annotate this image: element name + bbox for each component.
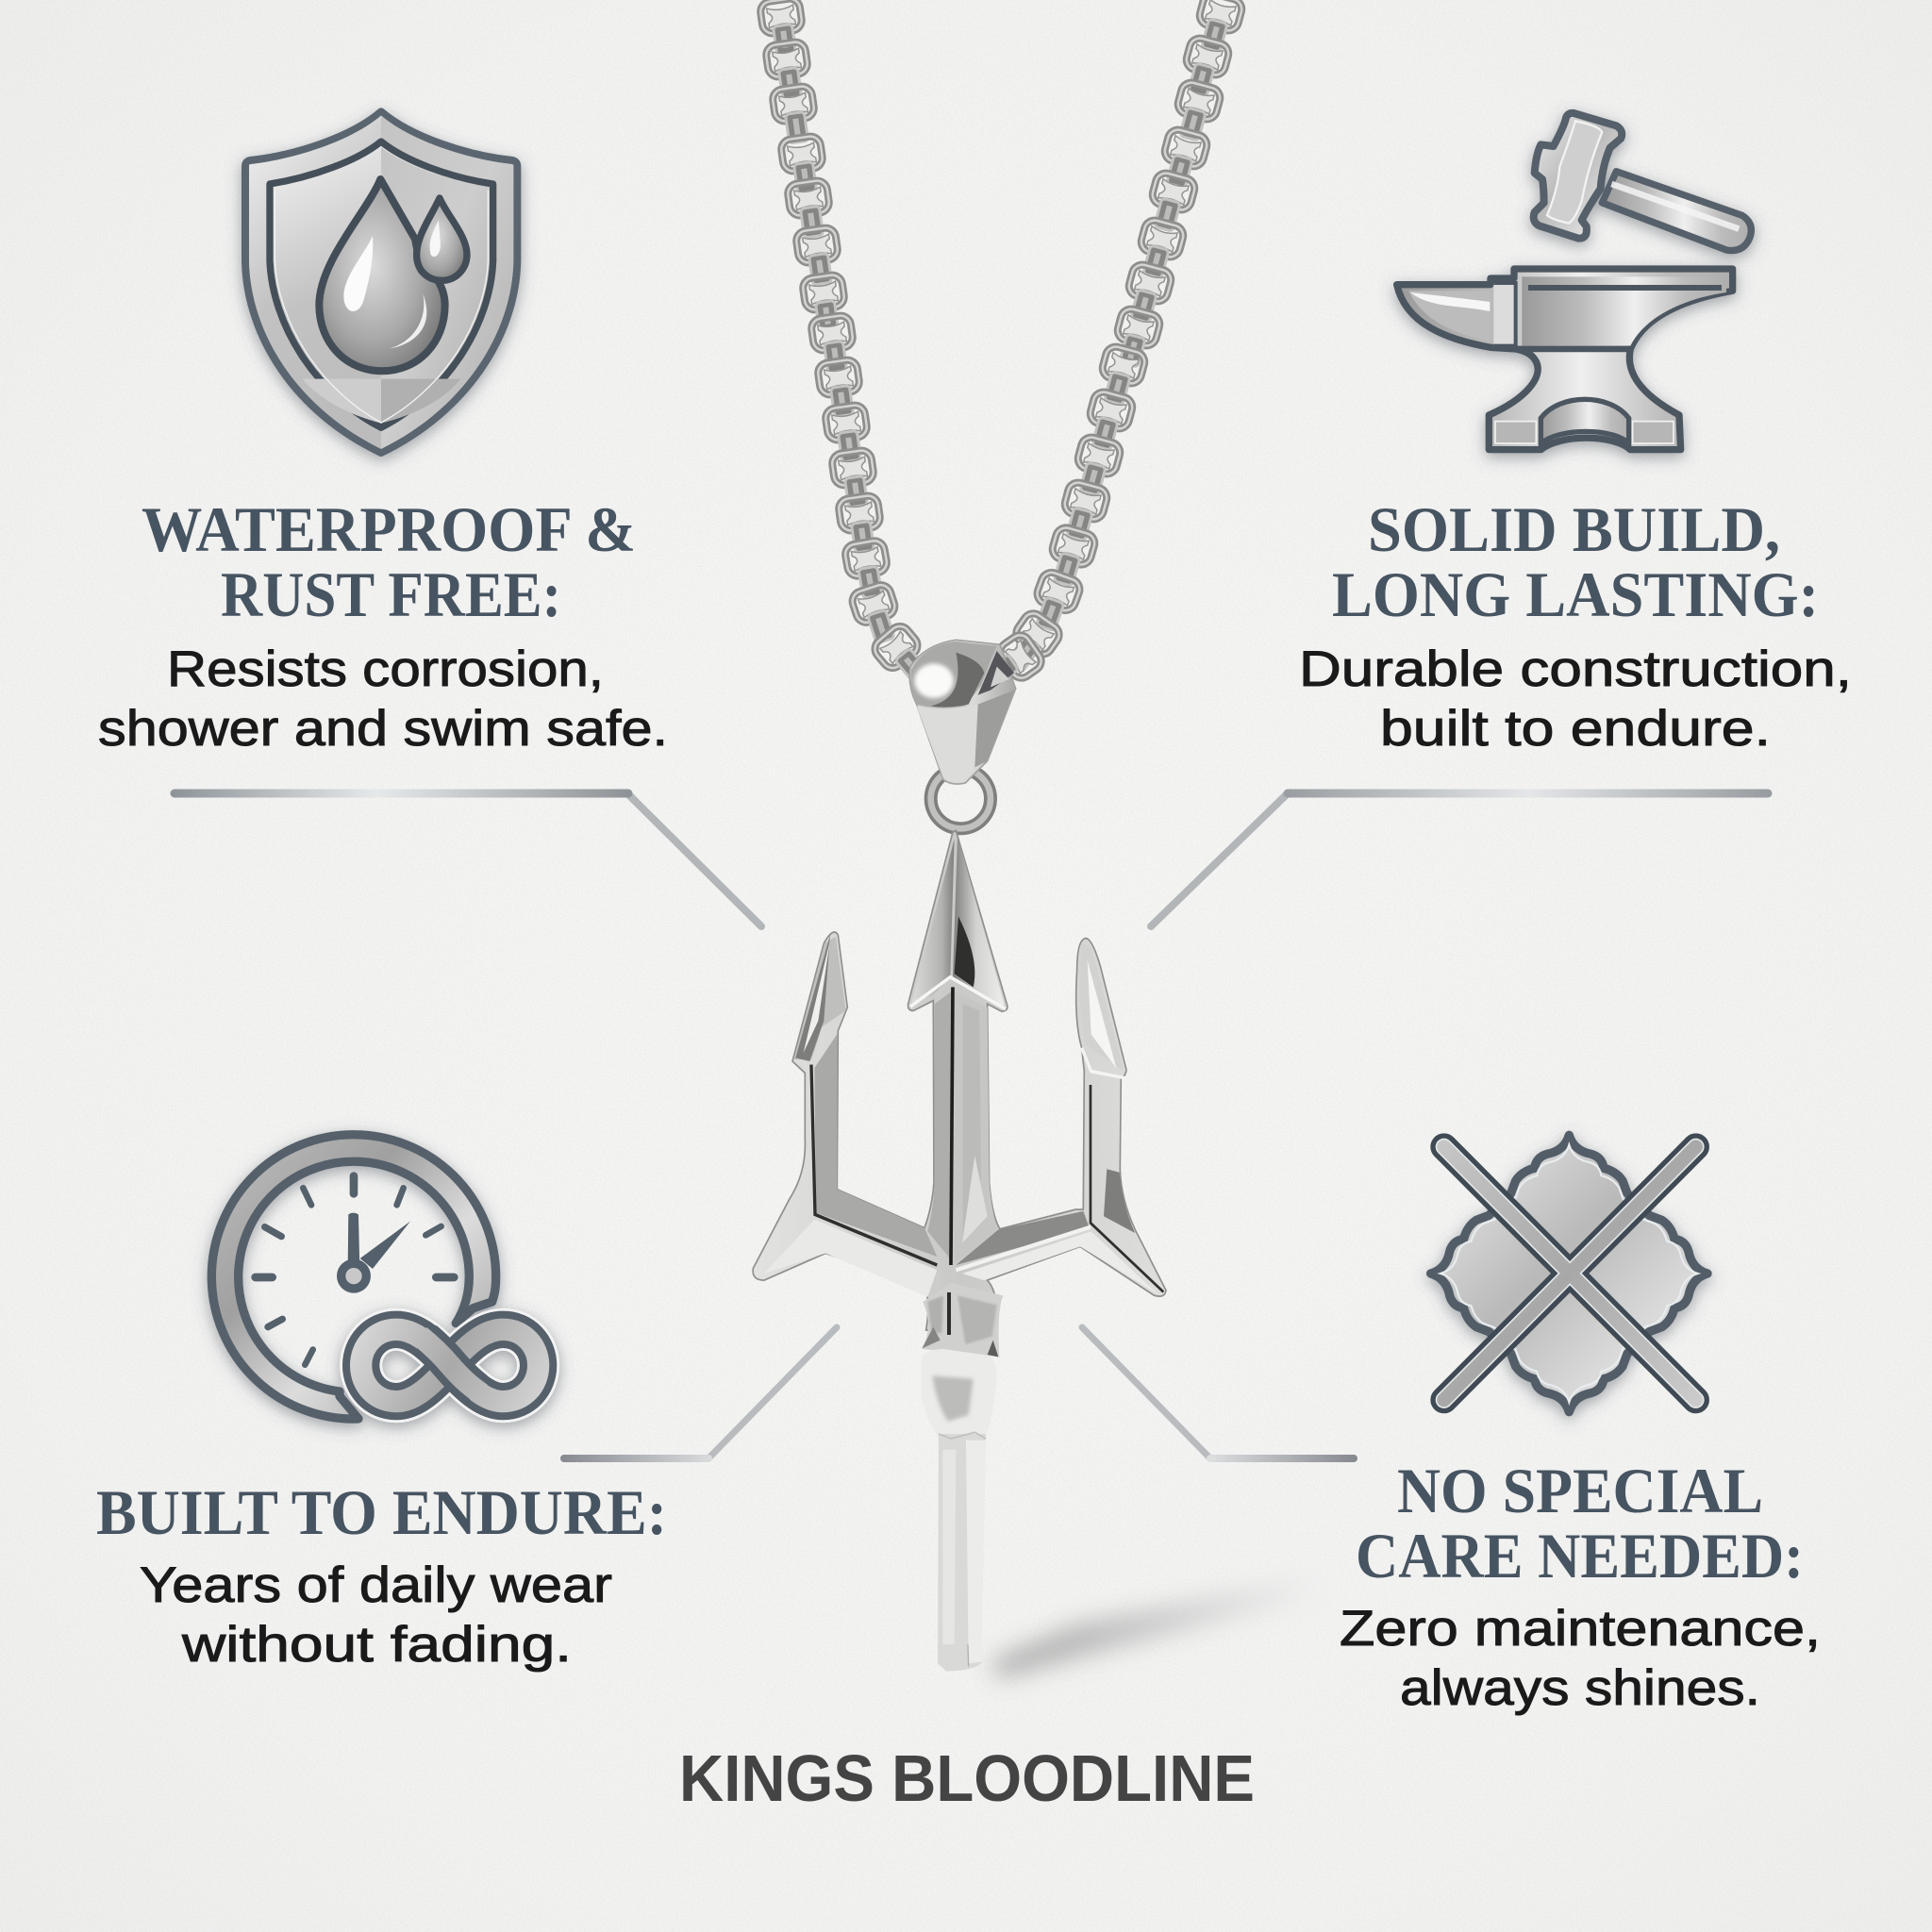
trident stem [922, 1283, 1003, 1672]
right chain strand [977, 0, 1244, 695]
jump ring [931, 769, 991, 828]
heading: RUST FREE: [221, 558, 561, 630]
lower cross shading [764, 1220, 937, 1297]
heading [1356, 1455, 1804, 1591]
description: always shines. [1400, 1660, 1760, 1716]
icon: shield with water drops [245, 111, 517, 453]
clock hands [337, 1213, 410, 1293]
heading: CARE NEEDED: [1356, 1520, 1804, 1591]
scalloped inner highlight [1441, 1145, 1698, 1402]
infinity symbol [361, 1329, 539, 1402]
necklace chain [759, 0, 1244, 695]
cast shadow of pendant [991, 1575, 1321, 1677]
anvil horn [1408, 291, 1490, 341]
anvil face and slot [1522, 276, 1726, 346]
feature text: built to endure [96, 1476, 667, 1673]
feature text: solid build [1299, 493, 1852, 757]
heading: LONG LASTING: [1332, 558, 1819, 630]
left arm shading [814, 1034, 937, 1257]
description [1340, 1601, 1821, 1716]
brand name: KINGS BLOODLINE [679, 1741, 1255, 1815]
heading: NO SPECIAL [1397, 1455, 1763, 1526]
small drop [417, 198, 467, 280]
bail dome [910, 641, 997, 708]
icon: clock with infinity [211, 1135, 539, 1419]
description: shower and swim safe. [98, 701, 668, 757]
shaft shading [927, 991, 953, 1260]
heading: BUILT TO ENDURE: [96, 1476, 667, 1548]
callout line: no special care [1082, 1327, 1354, 1458]
description: Durable construction, [1299, 641, 1852, 697]
description [98, 641, 668, 757]
icon: crossed-out tarnish badge [1431, 1135, 1707, 1412]
anvil body [1397, 269, 1733, 450]
stem [938, 1434, 986, 1672]
heading: WATERPROOF & [142, 493, 636, 565]
callout line: waterproof [175, 793, 761, 926]
description: Years of daily wear [140, 1557, 612, 1613]
left chain strand [759, 0, 936, 690]
icon: hammer and anvil [1397, 113, 1751, 450]
crossed bars [1444, 1147, 1696, 1400]
pendant bail and jump ring [909, 640, 1016, 828]
shield inner frame [270, 142, 493, 427]
bulb [922, 1349, 997, 1438]
hammer handle [1602, 172, 1751, 251]
description [140, 1557, 612, 1673]
description [1299, 641, 1852, 757]
hammer head [1534, 113, 1622, 239]
right arm shading [956, 1211, 1090, 1265]
neck [922, 1283, 1003, 1357]
callout line: built to endure [564, 1327, 837, 1458]
shield body [245, 111, 517, 453]
clock ticks [256, 1176, 454, 1365]
description: without fading. [181, 1617, 572, 1673]
description: built to endure. [1380, 701, 1771, 757]
large drop [319, 179, 445, 371]
heading [1332, 493, 1819, 630]
trident pendant [753, 830, 1166, 1330]
description: Resists corrosion, [167, 641, 604, 697]
bail [909, 640, 1016, 784]
feature text: waterproof [98, 493, 668, 757]
clock ring [211, 1135, 496, 1419]
feature text: no special care [1340, 1455, 1821, 1716]
heading [142, 493, 636, 630]
trident silhouette [753, 830, 1166, 1330]
centre spear head [912, 839, 955, 1002]
description: Zero maintenance, [1340, 1601, 1821, 1657]
callout line: solid build [1151, 793, 1768, 926]
heading: SOLID BUILD, [1368, 493, 1780, 565]
anvil feet [1495, 422, 1536, 443]
scalloped diamond [1431, 1135, 1707, 1412]
shield metallic quadrants [249, 115, 381, 449]
